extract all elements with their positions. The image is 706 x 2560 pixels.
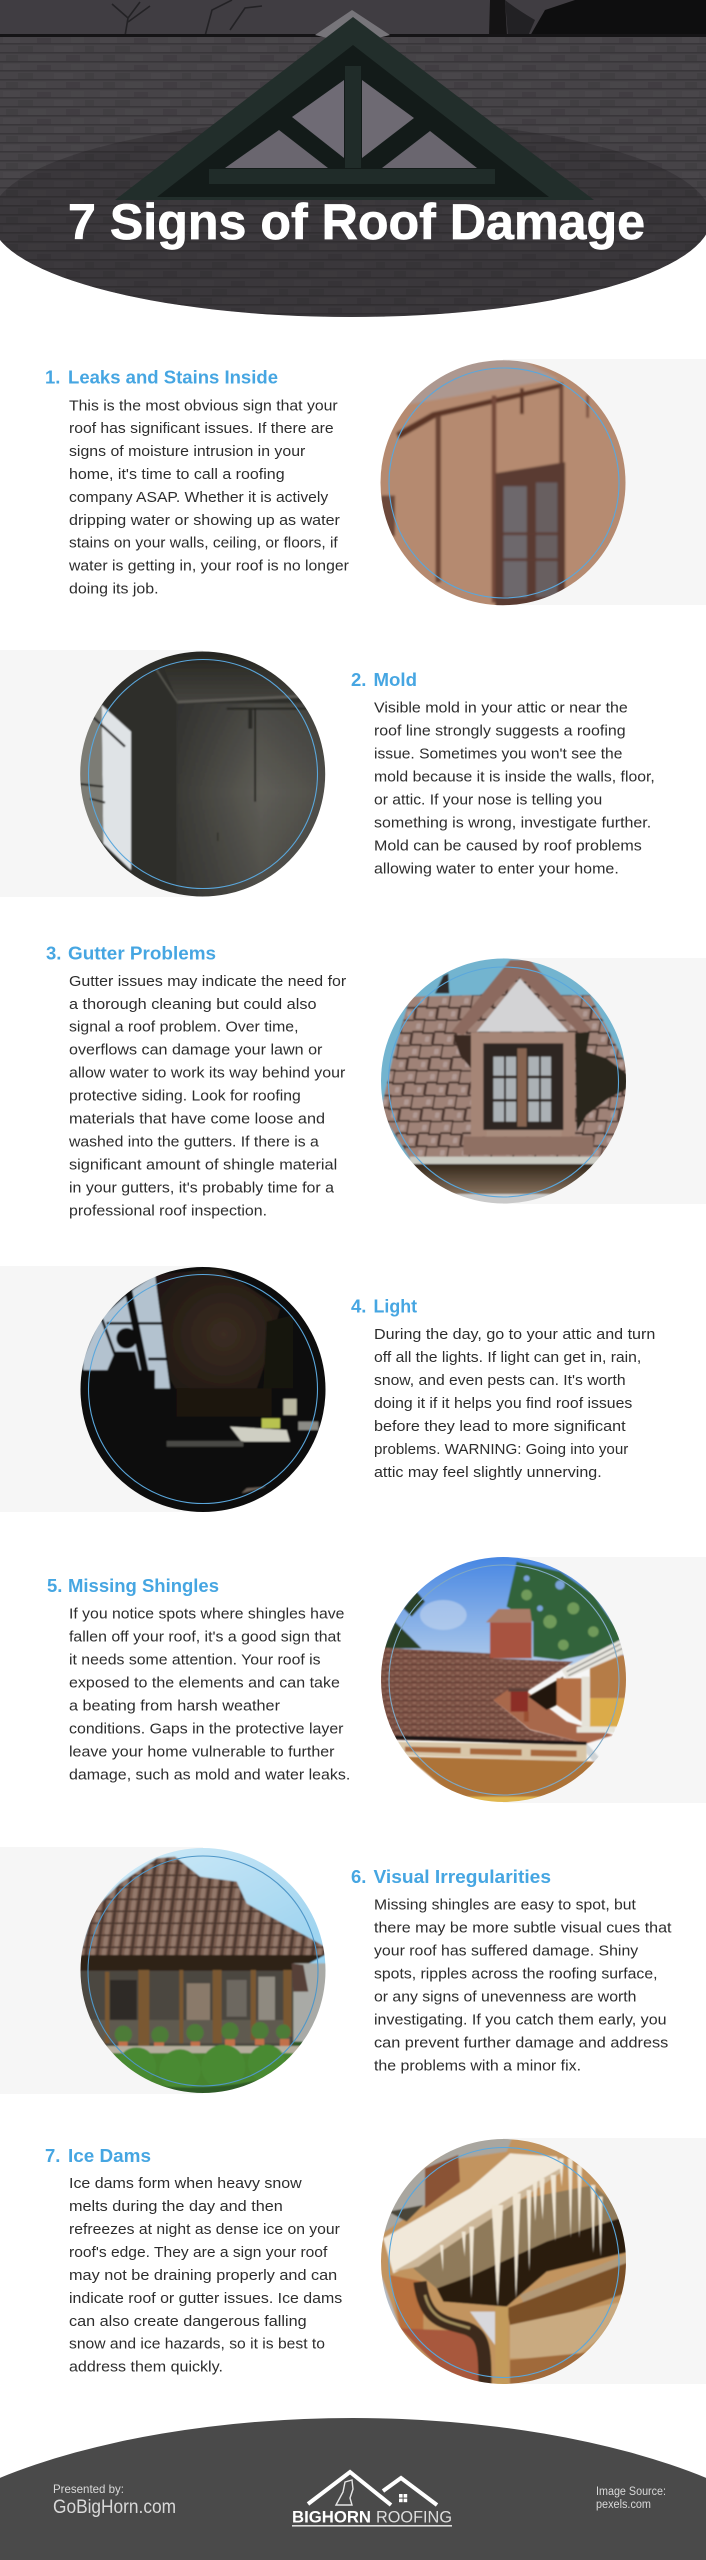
- body text: [68, 397, 349, 598]
- logo wordmark: BIGHORN: [292, 2508, 371, 2526]
- body text: water is getting in, your roof is no longer: [68, 558, 349, 575]
- body text: significant amount of shingle material: [69, 1156, 337, 1174]
- logo: bighorn roofing: [292, 2472, 452, 2527]
- photo: dark attic: [80, 1267, 326, 1512]
- body text: overflows can damage your lawn or: [69, 1042, 322, 1059]
- body text: company ASAP. Whether it is actively: [69, 489, 329, 506]
- body text: issue. Sometimes you won't see the: [374, 746, 622, 763]
- section 7: ice dams: [45, 2132, 706, 2392]
- body text: [69, 1606, 350, 1783]
- heading: 1.: [45, 367, 60, 388]
- gable inner dark: [157, 45, 549, 197]
- heading: Light: [374, 1296, 417, 1317]
- body text: [68, 973, 346, 1219]
- heading: 2.: [351, 669, 366, 690]
- logo wordmark: ROOFING: [376, 2508, 452, 2526]
- logo window: [399, 2494, 407, 2502]
- heading: [351, 669, 417, 690]
- body text: roof has significant issues. If there are: [69, 420, 334, 437]
- background band: [0, 650, 203, 897]
- gable fascia: [115, 17, 594, 200]
- body text: Gutter issues may indicate the need for: [69, 973, 346, 990]
- body text: your roof has suffered damage. Shiny: [374, 1942, 639, 1960]
- header: roof photo banner: [0, 0, 706, 325]
- body text: or attic. If your nose is telling you: [374, 792, 602, 809]
- body text: damage, such as mold and water leaks.: [69, 1766, 350, 1783]
- ring: [389, 2148, 619, 2378]
- body text: home, it's time to call a roofing: [69, 466, 285, 483]
- body text: the problems with a minor fix.: [374, 2057, 581, 2074]
- body text: leave your home vulnerable to further: [69, 1744, 334, 1760]
- body text: problems. WARNING: Going into your: [374, 1441, 628, 1458]
- photo: moldy attic corner: [73, 647, 333, 903]
- heading: Ice Dams: [68, 2145, 151, 2166]
- body text: allowing water to enter your home.: [374, 860, 619, 878]
- body text: Visible mold in your attic or near the: [374, 700, 628, 717]
- ring: [389, 1565, 619, 1795]
- section 2: mold: [0, 647, 655, 903]
- body text: signal a roof problem. Over time,: [69, 1019, 298, 1036]
- gable flashing: [315, 10, 390, 40]
- body text: in your gutters, it's probably time for a: [69, 1179, 335, 1196]
- body text: This is the most obvious sign that your: [69, 397, 338, 414]
- body text: exposed to the elements and can take: [69, 1675, 340, 1692]
- body text: fallen off your roof, it's a good sign that: [69, 1629, 342, 1646]
- body text: Missing shingles are easy to spot, but: [374, 1897, 637, 1914]
- body text: protective siding. Look for roofing: [69, 1088, 301, 1105]
- photo: icicles on gutter: [381, 2139, 626, 2384]
- ring: [389, 368, 619, 598]
- presented by: GoBigHorn.com: [53, 2497, 176, 2518]
- body text: may not be draining properly and can: [69, 2267, 337, 2284]
- trees behind roof: [112, 0, 706, 36]
- body text: melts during the day and then: [69, 2198, 283, 2215]
- body text: doing it if it helps you find roof issues: [374, 1395, 632, 1412]
- body text: attic may feel slightly unnerving.: [374, 1464, 602, 1481]
- body text: roof line strongly suggests a roofing: [374, 723, 626, 740]
- body text: roof's edge. They are a sign your roof: [69, 2244, 328, 2261]
- heading: 4.: [351, 1296, 366, 1317]
- section 5: missing shingles: [47, 1552, 706, 1805]
- body text: there may be more subtle visual cues that: [374, 1920, 672, 1937]
- body text: can also create dangerous falling: [69, 2313, 307, 2330]
- heading: Visual Irregularities: [374, 1866, 551, 1887]
- body text: it needs some attention. Your roof is: [69, 1652, 321, 1669]
- body text: conditions. Gaps in the protective layer: [69, 1720, 344, 1738]
- body text: professional roof inspection.: [69, 1202, 267, 1219]
- background band: [0, 1847, 203, 2094]
- background band: [503, 958, 706, 1204]
- photo: red tiled roof and chimney: [373, 1552, 633, 1805]
- background band: [503, 1557, 706, 1803]
- body text: Mold can be caused by roof problems: [374, 838, 642, 854]
- heading: Mold: [374, 669, 417, 690]
- heading: 3.: [46, 942, 61, 963]
- body text: a thorough cleaning but could also: [69, 996, 316, 1013]
- background band: [503, 2138, 706, 2384]
- heading: 7.: [45, 2145, 60, 2166]
- body text: dripping water or showing up as water: [69, 512, 340, 529]
- ring: [88, 1856, 318, 2086]
- heading: 5.: [47, 1575, 62, 1596]
- body text: a beating from harsh weather: [69, 1698, 280, 1714]
- photo: dormer and tiled roof: [381, 958, 626, 1204]
- footer: [0, 2418, 706, 2560]
- footer background: [0, 2418, 706, 2560]
- roof surface: [0, 35, 706, 325]
- presented by: [53, 2482, 176, 2518]
- body text: During the day, go to your attic and turn: [374, 1326, 655, 1343]
- body text: [374, 1326, 655, 1481]
- title: 7 Signs of Roof Damage: [68, 194, 645, 250]
- photo: house with tiled roof: [80, 1848, 326, 2093]
- section 4: light: [0, 1262, 655, 1518]
- window panes: [225, 80, 477, 168]
- body text: or any signs of unevenness are worth: [374, 1988, 636, 2005]
- body text: washed into the gutters. If there is a: [68, 1134, 319, 1150]
- body text: allow water to work its way behind your: [69, 1065, 345, 1082]
- sky: [0, 0, 575, 34]
- heading: Gutter Problems: [68, 942, 216, 963]
- background band: [503, 359, 706, 605]
- body text: something is wrong, investigate further.: [374, 814, 651, 832]
- image source: pexels.com: [596, 2499, 651, 2511]
- ring: [388, 967, 618, 1197]
- body text: spots, ripples across the roofing surface,: [374, 1966, 658, 1982]
- body text: materials that have come loose and: [69, 1111, 325, 1128]
- presented by: Presented by:: [53, 2482, 124, 2496]
- body text: [69, 2175, 342, 2376]
- body text: [374, 700, 655, 878]
- dark ellipse overlay: [0, 119, 706, 317]
- body text: before they lead to more significant: [374, 1418, 626, 1435]
- heading: Missing Shingles: [68, 1575, 219, 1596]
- section 3: gutter problems: [46, 942, 706, 1219]
- body text: address them quickly.: [69, 2359, 223, 2376]
- logo ram: [336, 2480, 353, 2505]
- gable timbers: [209, 169, 495, 184]
- heading: 6.: [351, 1866, 366, 1887]
- body text: off all the lights. If light can get in, rain,: [374, 1349, 641, 1366]
- photo: stained wall: [380, 360, 626, 606]
- section 1: leaks and stains: [45, 351, 706, 614]
- ring: [88, 1274, 318, 1504]
- body text: investigating. If you catch them early, you: [374, 2011, 666, 2028]
- logo wordmark: [292, 2508, 452, 2526]
- body text: snow and ice hazards, so it is best to: [69, 2336, 325, 2353]
- body text: doing its job.: [69, 580, 159, 598]
- heading: [351, 1296, 417, 1317]
- body text: refreezes at night as dense ice on your: [69, 2221, 340, 2238]
- body text: [374, 1897, 672, 2074]
- section 6: visual irregularities: [0, 1843, 672, 2107]
- body text: Ice dams form when heavy snow: [69, 2175, 302, 2192]
- background band: [0, 1266, 203, 1512]
- body text: indicate roof or gutter issues. Ice dams: [69, 2290, 342, 2307]
- logo roofs: [308, 2472, 437, 2505]
- body text: can prevent further damage and address: [374, 2034, 668, 2051]
- heading: Leaks and Stains Inside: [68, 367, 278, 388]
- body text: mold because it is inside the walls, floor,: [374, 769, 655, 786]
- image source: Image Source:: [596, 2486, 666, 2498]
- body text: snow, and even pests can. It's worth: [374, 1372, 626, 1389]
- ring: [88, 660, 318, 888]
- image source: [596, 2486, 666, 2511]
- body text: If you notice spots where shingles have: [69, 1606, 344, 1623]
- body text: stains on your walls, ceiling, or floors, if: [69, 535, 339, 552]
- body text: signs of moisture intrusion in your: [69, 443, 305, 460]
